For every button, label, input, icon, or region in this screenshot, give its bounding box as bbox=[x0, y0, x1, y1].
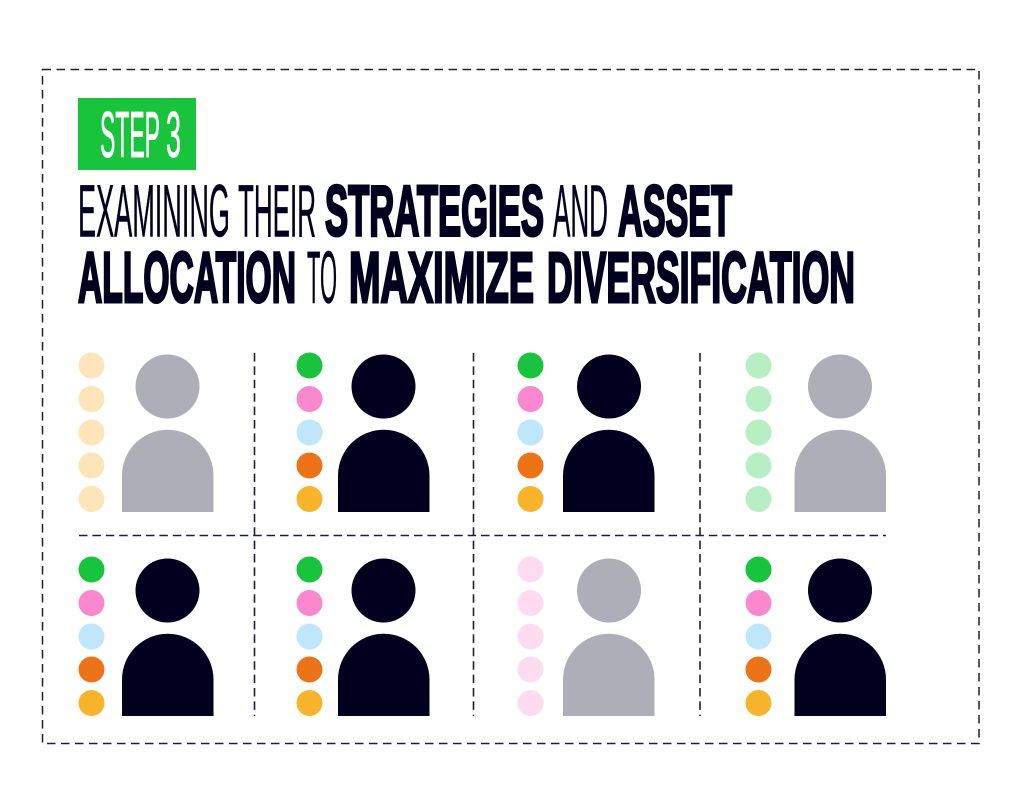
person 3: active bbox=[518, 352, 654, 512]
grid dividers bbox=[79, 353, 886, 716]
person 4: inactive, green dots bbox=[746, 352, 886, 512]
title: ASSET bbox=[618, 172, 732, 252]
title: TO bbox=[307, 236, 337, 319]
person 1: inactive, cream dots bbox=[78, 352, 214, 512]
person 2: active bbox=[296, 352, 430, 512]
step badge bbox=[78, 98, 196, 171]
title: STRATEGIES bbox=[325, 172, 544, 252]
person 5: active bbox=[78, 556, 214, 716]
person 7: inactive, pink dots bbox=[518, 556, 654, 716]
step badge: 3 bbox=[166, 98, 181, 171]
title bbox=[78, 170, 855, 319]
title: EXAMINING bbox=[78, 170, 230, 252]
title: AND bbox=[553, 170, 608, 252]
title: ALLOCATION bbox=[78, 239, 296, 318]
step badge: STEP bbox=[100, 98, 160, 171]
person 8: active bbox=[746, 556, 886, 716]
title: MAXIMIZE bbox=[349, 239, 534, 318]
dashed outer frame bbox=[42, 70, 979, 744]
person 6: active bbox=[296, 556, 430, 716]
title: THEIR bbox=[238, 170, 316, 252]
